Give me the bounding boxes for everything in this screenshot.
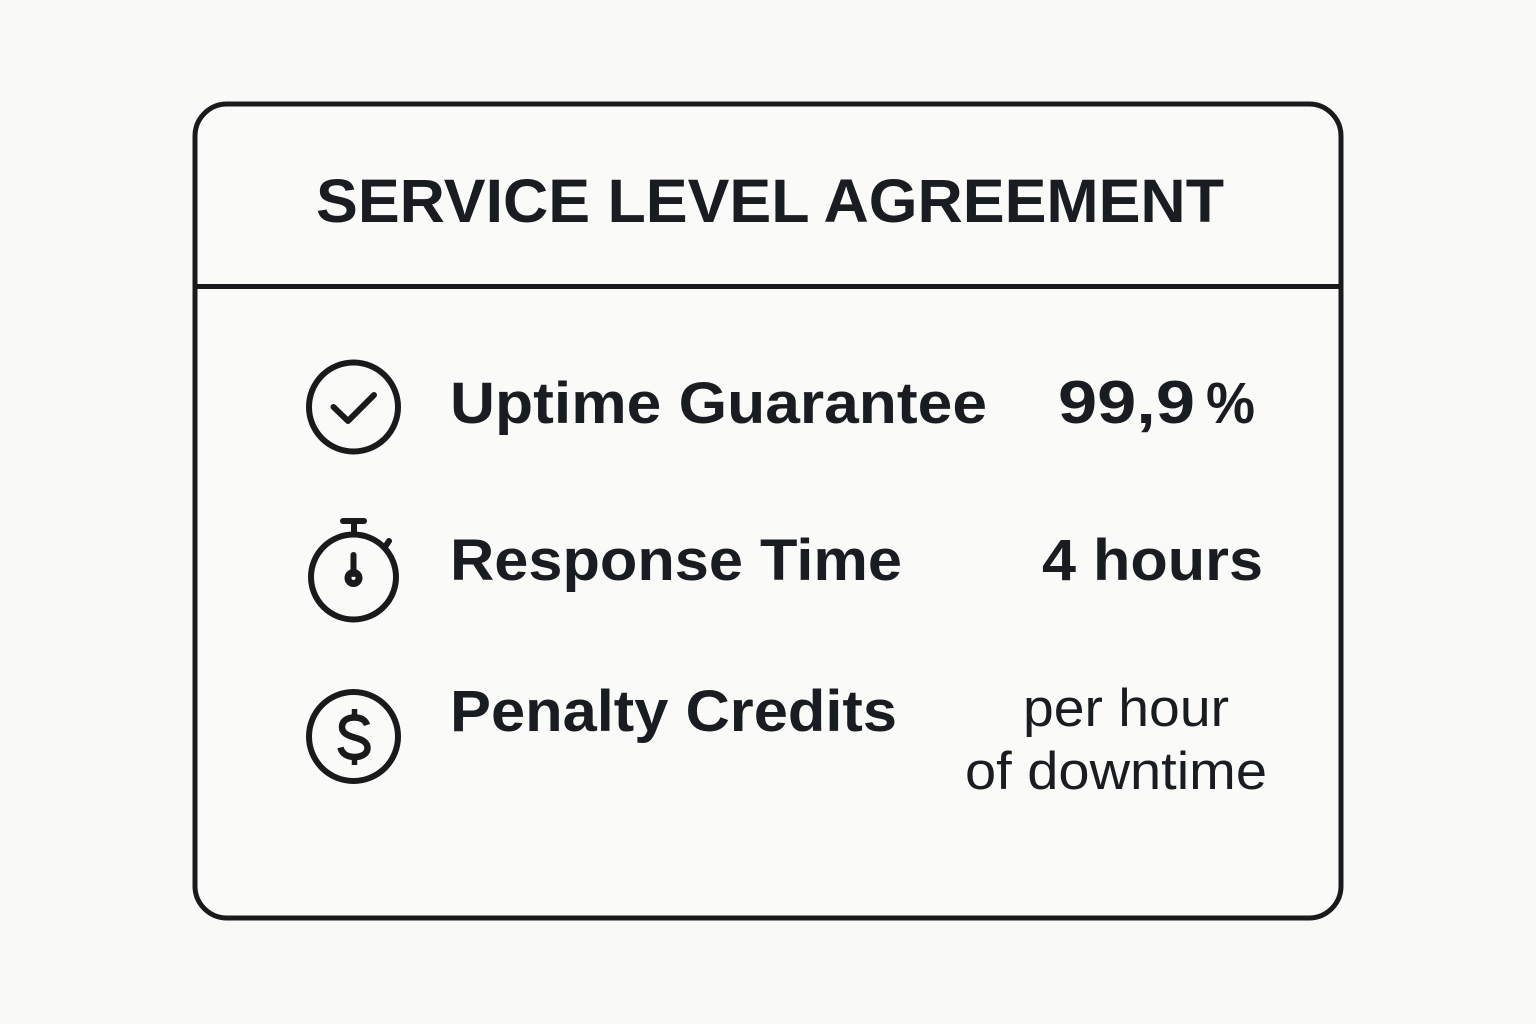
label: response time: Response Time: [450, 528, 902, 593]
row: uptime guarantee: [309, 362, 1255, 452]
value: per hour of downtime: [965, 679, 1267, 801]
value: uptime percentage: %: [1206, 371, 1255, 436]
row: response time: [311, 521, 1263, 620]
row: penalty credits: [309, 679, 1267, 801]
value: uptime percentage: [1058, 369, 1255, 436]
value: response hours: 4 hours: [1042, 528, 1263, 593]
value: per hour of downtime: per hour: [1023, 679, 1229, 738]
label: penalty credits: Penalty Credits: [450, 679, 897, 744]
value: per hour of downtime: of downtime: [965, 742, 1267, 801]
icon: dollar circle: [309, 692, 398, 781]
icon: stopwatch: [311, 521, 396, 620]
title: SERVICE LEVEL AGREEMENT: [316, 167, 1224, 235]
value: uptime percentage: 99,9: [1058, 369, 1195, 436]
panel: service level agreement card: [195, 104, 1341, 918]
label: uptime guarantee: Uptime Guarantee: [450, 371, 987, 436]
icon: check circle: [309, 362, 398, 452]
